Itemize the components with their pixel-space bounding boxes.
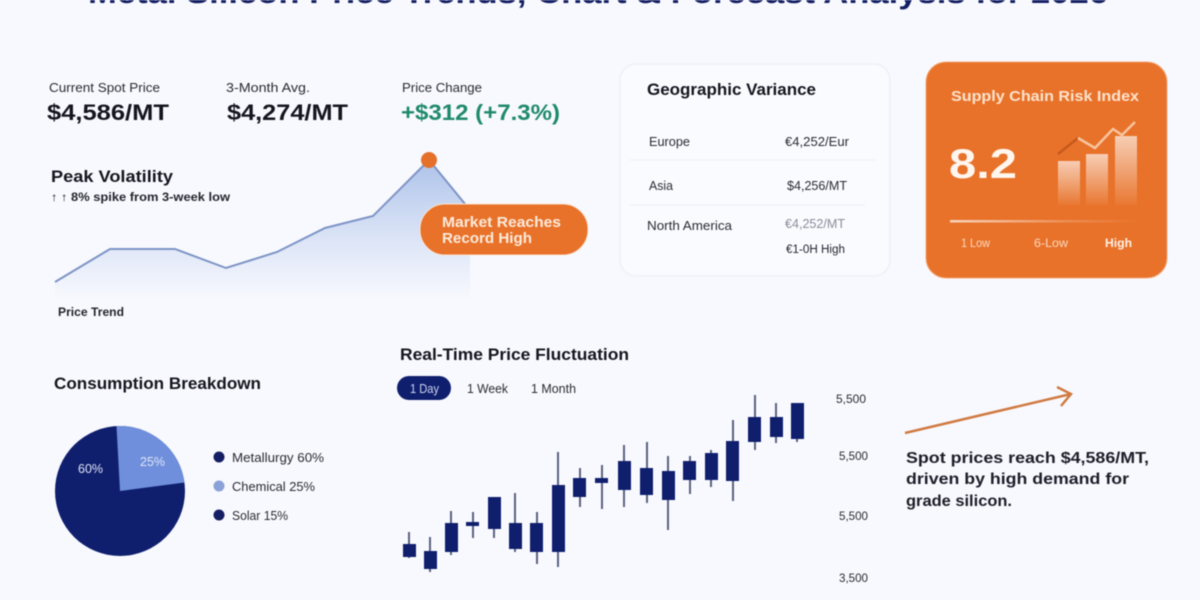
price axis labels: 5,500 (836, 392, 866, 406)
stat: price change: +$312 (+7.3%) (401, 100, 560, 125)
stat: price change (401, 80, 560, 125)
row: Asia: Asia (649, 179, 673, 193)
icon: rising bar chart (1058, 122, 1137, 205)
legend: consumption (214, 451, 324, 523)
summary text: driven by high demand for (906, 471, 1129, 488)
heading: geographic variance: Geographic Variance (647, 80, 816, 99)
legend: consumption: Solar 15% (232, 509, 288, 523)
row: North America (647, 217, 845, 256)
stat: 3-month average (226, 80, 349, 125)
price axis labels: 5,500 (839, 449, 868, 463)
callout: market reaches record high: Record High (442, 230, 532, 247)
pie chart: consumption (55, 426, 185, 556)
price axis labels: 5,500 (839, 509, 868, 523)
stat: current spot price: $4,586/MT (47, 100, 170, 125)
stat: current spot price (47, 80, 170, 125)
panel: supply chain risk index (926, 62, 1167, 278)
heading: real-time price fluctuation: Real-Time Price Fluctuation (400, 345, 629, 364)
heading: peak volatility: Peak Volatility (51, 167, 174, 186)
heading: peak volatility: ↑ ↑ 8% spike from 3-week low (51, 192, 230, 204)
stat: price change: Price Change (402, 80, 482, 95)
summary text: grade silicon. (906, 493, 1012, 510)
legend: consumption: Metallurgy 60% (232, 451, 324, 465)
label: price trend: Price Trend (58, 305, 124, 319)
row: Europe (649, 135, 849, 149)
time range tabs: 1 Week (467, 382, 509, 396)
row: Europe: Europe (649, 135, 690, 149)
stat: 3-month average: 3-Month Avg. (226, 80, 310, 95)
heading: supply chain risk index: Supply Chain Risk Index (951, 88, 1140, 105)
row: North America: €4,252/MT (785, 217, 845, 231)
panel: geographic variance (620, 64, 890, 276)
row: North America: €1-0H High (786, 244, 845, 256)
summary text: Spot prices reach $4,586/MT, (906, 450, 1149, 467)
time range tabs (397, 376, 576, 400)
row: Asia (649, 179, 847, 193)
stat: 3-month average: $4,274/MT (227, 100, 349, 125)
arrow: upward trend (905, 387, 1071, 433)
risk scale: High (1105, 236, 1132, 250)
legend: consumption: Chemical 25% (232, 480, 315, 494)
stat: current spot price: Current Spot Price (49, 80, 160, 95)
pie chart: consumption: 60% (78, 462, 103, 476)
heading: consumption breakdown: Consumption Breakdown (54, 374, 261, 393)
line chart: price trend (55, 152, 470, 300)
candlestick chart (403, 395, 804, 572)
time range tabs: 1 Month (531, 382, 576, 396)
risk scale (950, 220, 1140, 250)
heading: peak volatility (51, 167, 230, 204)
row: Asia: $4,256/MT (787, 179, 847, 193)
callout: market reaches record high (420, 204, 588, 255)
row: North America: North America (647, 219, 732, 233)
pie chart: consumption: 25% (140, 455, 165, 469)
value: 8.2: 8.2 (949, 140, 1017, 187)
summary text (906, 450, 1149, 510)
row: Europe: €4,252/Eur (785, 135, 849, 149)
risk scale: 6-Low (1034, 236, 1068, 250)
callout: market reaches record high: Market Reaches (442, 214, 561, 231)
price axis labels: 3,500 (839, 571, 868, 585)
time range tabs: 1 Day (410, 382, 440, 396)
risk scale: 1 Low (961, 236, 990, 250)
price axis labels (836, 392, 868, 585)
